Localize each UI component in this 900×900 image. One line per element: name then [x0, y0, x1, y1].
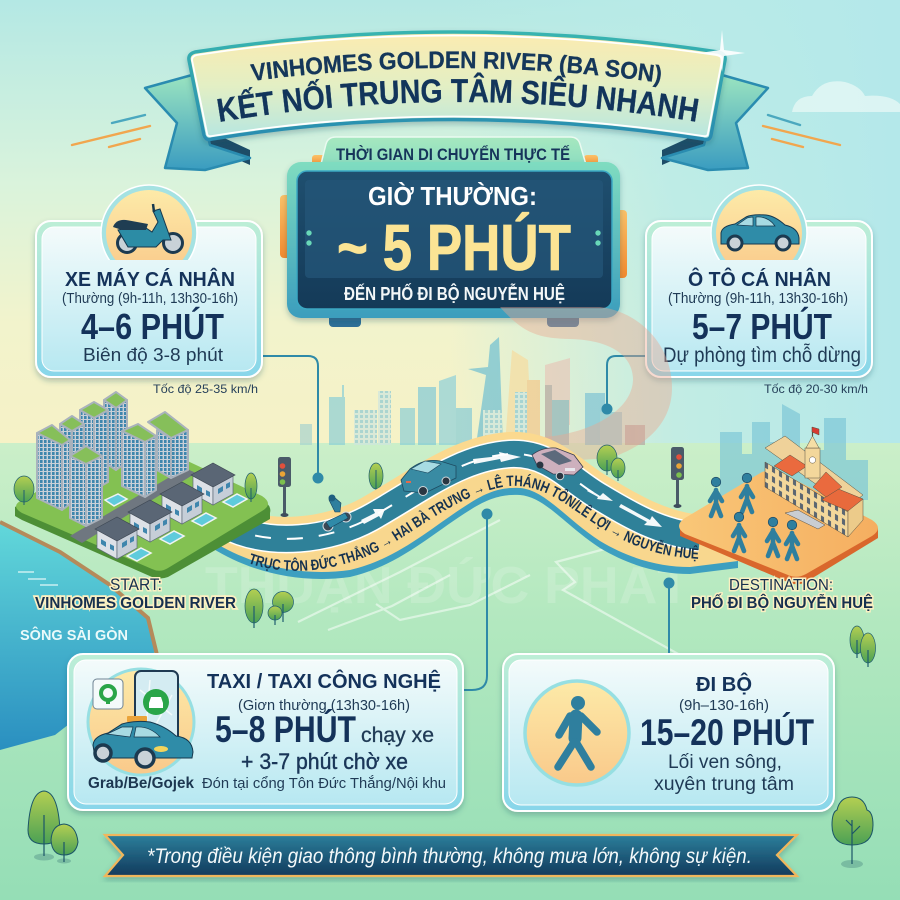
start label: VINHOMES GOLDEN RIVER [35, 595, 236, 612]
watermark letter D upper part [500, 307, 672, 395]
waiting time: + 3-7 phút chờ xe [241, 749, 408, 774]
heading: Ô TÔ CÁ NHÂN [688, 267, 831, 291]
heading: XE MÁY CÁ NHÂN [65, 267, 235, 291]
icon: taxi and phone [88, 669, 194, 775]
hours: (Thường (9h-11h, 13h30-16h) [62, 290, 238, 307]
card body [36, 221, 262, 377]
icon: car [710, 184, 808, 260]
route note line two: xuyên trung tâm [654, 774, 794, 795]
faint ground streets [298, 520, 680, 655]
connector: car [602, 356, 646, 414]
heading: ĐI BỘ [696, 672, 752, 696]
destination label: DESTINATION: [729, 577, 833, 594]
panel: car [646, 185, 872, 377]
speed lines right [763, 115, 840, 147]
card inner [74, 660, 457, 804]
title ribbon [144, 30, 770, 172]
title line two: KẾT NỐI TRUNG TÂM SIÊU NHANH [217, 72, 699, 122]
ride label: chạy xe [361, 724, 434, 747]
left traffic light [278, 457, 291, 517]
panel: walking [503, 654, 834, 811]
connector: taxi [460, 510, 492, 690]
card inner [652, 227, 866, 371]
panel: taxi [68, 654, 463, 810]
brand labels: Grab/Be/Gojek [88, 775, 194, 792]
ribbon main band [189, 32, 725, 140]
start platform with towers and villas [14, 392, 270, 578]
side orange tabs [280, 155, 627, 278]
five minutes text: ~ 5 PHÚT [337, 211, 571, 284]
car speed note: Tốc độ 20-30 km/h [764, 382, 868, 396]
hours: (9h–130-16h) [679, 697, 769, 714]
card body [68, 654, 463, 810]
tree bottom left [28, 791, 78, 864]
road arrows [361, 452, 662, 527]
ribbon left tail [145, 75, 250, 170]
destination platform with city hall and pedestrians [679, 427, 878, 584]
heading tab [320, 137, 587, 168]
ribbon highlight [192, 36, 722, 136]
time: 15–20 PHÚT [640, 711, 814, 753]
river name: SÔNG SÀI GÒN [20, 626, 128, 644]
card body [503, 654, 834, 811]
start label: START: [110, 575, 162, 594]
road with lanes [212, 447, 738, 579]
distant city skyline [300, 337, 645, 445]
connector: motorbike [262, 356, 322, 482]
route note line one: Lối ven sông, [668, 752, 782, 773]
destination label [691, 577, 873, 612]
icon: motorbike [100, 184, 198, 260]
speed lines left [72, 115, 150, 147]
time: 5–8 PHÚT [215, 708, 356, 750]
cloud [792, 81, 900, 112]
route label on road: TRỤC TÔN ĐỨC THẮNG → HAI BÀ TRƯNG → LÊ THÁNH TÔN/LÊ LỢI → NGUYỄN HUỆ [250, 474, 698, 571]
connector: walking [664, 578, 674, 655]
card inner [42, 227, 256, 371]
feet [329, 312, 579, 327]
indicator dots [306, 230, 601, 246]
panel: motorbike [36, 185, 262, 377]
outer frame [287, 162, 620, 318]
screen inset [305, 180, 603, 278]
title line one: VINHOMES GOLDEN RIVER (BA SON) [250, 51, 661, 88]
destination label: PHỐ ĐI BỘ NGUYỄN HUỆ [691, 592, 873, 612]
note: Dự phòng tìm chỗ dừng [663, 344, 861, 367]
river [0, 522, 157, 750]
dark screen [297, 171, 612, 309]
green ground [0, 443, 900, 900]
time: 5–7 PHÚT [692, 305, 832, 347]
ribbon right tail [662, 75, 768, 170]
tree bottom right [832, 797, 873, 868]
motorbike on road [323, 494, 351, 531]
background sky [0, 0, 900, 450]
card inner [509, 660, 828, 805]
range: Biên độ 3-8 phút [83, 345, 223, 365]
background right tint [0, 0, 900, 450]
pink car on road [532, 448, 583, 480]
sparkle [700, 30, 745, 72]
central time display [280, 137, 627, 327]
right traffic light [671, 447, 684, 508]
lower trees [245, 589, 876, 667]
start label [35, 575, 236, 612]
skyline behind destination [720, 404, 868, 500]
footnote text: *Trong điều kiện giao thông bình thường, không mưa lớn, không sự kiện. [147, 845, 752, 868]
hours: (Giơn thường (13h30-16h) [238, 697, 410, 714]
watermark text: THUẬN ĐỨC PHÁT [205, 556, 690, 615]
motorbike speed note: Tốc độ 25-35 km/h [153, 382, 258, 396]
heading: TAXI / TAXI CÔNG NGHỆ [207, 669, 441, 693]
time: 4–6 PHÚT [81, 305, 224, 347]
hours: (Thường (9h-11h, 13h30-16h) [668, 290, 848, 307]
tab text: THỜI GIAN DI CHUYỂN THỰC TẾ [336, 145, 570, 164]
icon: pedestrian [525, 681, 629, 785]
roadside trees upper [369, 445, 625, 490]
card body [646, 221, 872, 377]
watermark letter D lower part [544, 395, 672, 460]
normal hours text: GIỜ THƯỜNG: [368, 181, 537, 211]
teal car on road [401, 460, 456, 496]
footer ribbon [105, 835, 797, 876]
pickup note: Đón tại cổng Tôn Đức Thắng/Nội khu [202, 775, 446, 792]
destination text: ĐẾN PHỐ ĐI BỘ NGUYỄN HUỆ [344, 283, 565, 304]
